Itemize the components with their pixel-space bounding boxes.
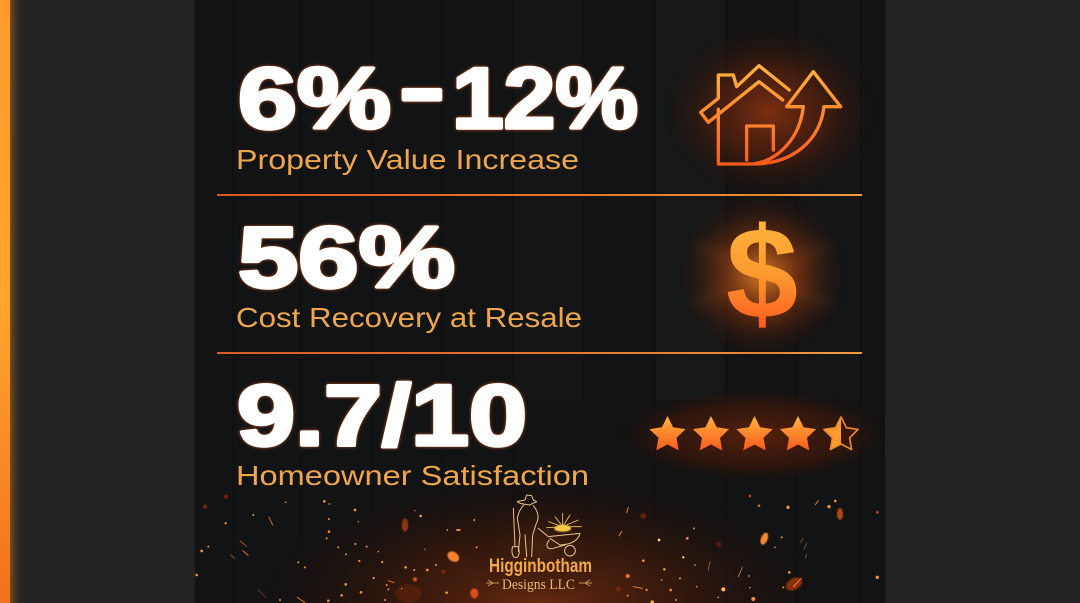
left accent bar xyxy=(0,0,24,603)
stat 1 value: 6% xyxy=(238,51,391,147)
stat 1 value: - xyxy=(399,40,445,136)
fire glow and sparks xyxy=(195,470,885,603)
logo: sunburst xyxy=(547,513,582,531)
sparks: lower left xyxy=(195,495,478,603)
stat 3 value: 9.7/10 xyxy=(237,368,527,464)
logo: Higginbotham wordmark: Higginbotham xyxy=(489,556,592,577)
stat 1 label: Property Value Increase xyxy=(236,144,579,175)
stat 3 label: Homeowner Satisfaction xyxy=(236,460,589,491)
stat 2: 56% cost recovery xyxy=(236,210,582,333)
icon: house with rising arrow xyxy=(665,27,875,197)
icon: dollar sign xyxy=(678,191,846,359)
star 3 xyxy=(736,416,773,450)
star 1 xyxy=(649,416,686,450)
stat 1: 6%-12% property value increase xyxy=(236,40,638,175)
icon: dollar sign: $ xyxy=(726,200,798,346)
star 4 xyxy=(780,416,816,450)
star 2 xyxy=(693,416,729,450)
icon: star rating 4.5 of 5 xyxy=(620,389,890,481)
stat 2 value: 56% xyxy=(238,210,455,306)
stat 1 value: 12% xyxy=(452,51,638,147)
logo: gardener and wheelbarrow line art xyxy=(512,495,580,558)
sparks: lower right xyxy=(616,495,879,603)
logo: Higginbotham Designs LLC xyxy=(486,495,592,593)
divider 2 xyxy=(217,352,862,354)
star 5 half xyxy=(824,417,858,450)
panel: charred wood background xyxy=(195,0,885,603)
logo: Designs LLC: Designs LLC xyxy=(502,577,575,593)
stat 3: 9.7/10 satisfaction xyxy=(236,368,589,491)
divider 1 xyxy=(217,194,862,196)
stat 2 label: Cost Recovery at Resale xyxy=(236,302,582,333)
